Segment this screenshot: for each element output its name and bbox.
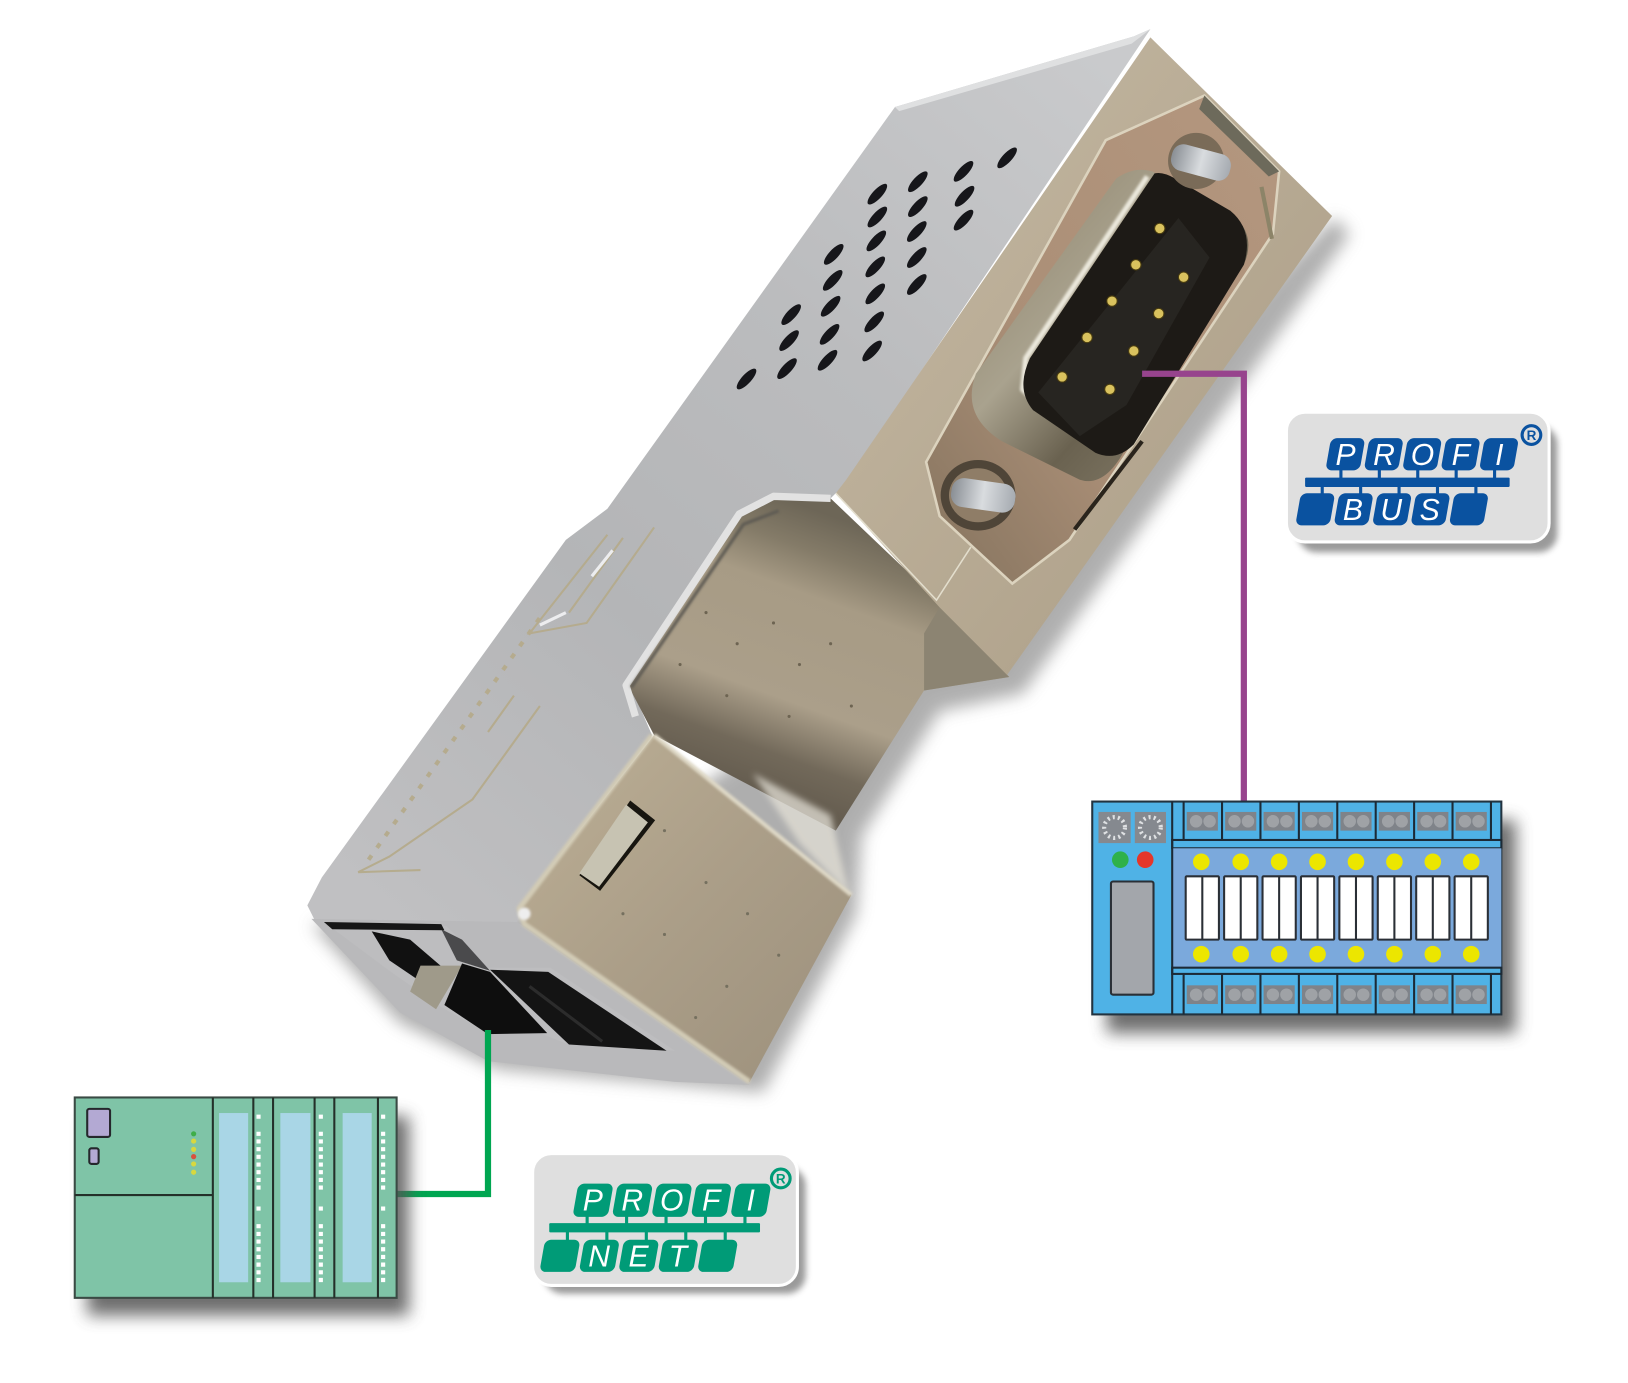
top terminals: [1187, 812, 1487, 831]
IO indicator dots: [259, 1115, 383, 1282]
PROFINET logo: R: [621, 1185, 643, 1218]
PROFINET logo: R: [776, 1172, 786, 1187]
PROFIBUS logo: O: [1411, 439, 1434, 472]
PROFIBUS logo: S: [1420, 494, 1440, 527]
drop shadow of gateway: [311, 218, 1350, 1092]
front cap: [518, 735, 851, 1082]
PROFINET logo: F: [702, 1185, 722, 1218]
status LEDs: [1112, 851, 1154, 868]
rotary dials: [1098, 812, 1166, 843]
PROFIBUS cable: [1142, 374, 1244, 802]
yellow LEDs: [1193, 853, 1480, 962]
PROFINET logo: P: [583, 1185, 603, 1218]
CPU slots: [87, 1109, 110, 1164]
connector shell: [972, 170, 1248, 481]
engraved logo lines: [358, 527, 654, 872]
upper screw: [1168, 133, 1234, 189]
PROFIBUS logo: P: [1336, 439, 1356, 472]
bottom terminals: [1187, 985, 1487, 1004]
connector inner black: [1023, 173, 1247, 456]
PROFINET cable: [397, 1030, 488, 1194]
PLC shadow: [87, 1116, 409, 1315]
PROFINET logo: I: [746, 1185, 755, 1218]
label window: [1111, 882, 1154, 995]
PROFINET logo: E: [628, 1241, 649, 1274]
rear plate with connector: [836, 37, 1332, 675]
pins: [1057, 223, 1189, 395]
PROFIBUS logo: R: [1373, 439, 1395, 472]
lower screw: [941, 460, 1017, 531]
module shadow: [1107, 820, 1516, 1033]
white relay blocks: [1186, 876, 1488, 940]
PROFIBUS logo: B: [1343, 494, 1363, 527]
PROFIBUS logo: [1286, 412, 1557, 552]
PROFINET logo: T: [669, 1241, 690, 1274]
PROFINET logo: O: [660, 1185, 683, 1218]
metal recess: [926, 96, 1279, 584]
PLC blue panels: [219, 1113, 372, 1282]
PROFIBUS logo: F: [1452, 439, 1472, 472]
end face with ethernet ports: [311, 919, 750, 1085]
PROFIBUS logo: U: [1380, 494, 1402, 527]
PROFIBUS logo: R: [1527, 428, 1537, 443]
PLC: [75, 1097, 409, 1315]
module bus panel: [1172, 802, 1501, 1014]
gateway connector photo: [307, 29, 1350, 1092]
IO module: [1092, 802, 1516, 1033]
PROFINET logo: [533, 1154, 806, 1294]
speckles on middle section: [679, 611, 853, 718]
PROFINET logo: N: [588, 1241, 610, 1274]
vent holes: [734, 145, 1020, 392]
middle recessed section: [626, 496, 1009, 895]
speckles on cap: [621, 829, 780, 1019]
latch slot: [579, 801, 655, 891]
CPU LEDs: [191, 1131, 196, 1175]
PROFIBUS logo: I: [1495, 439, 1504, 472]
silver top face: [307, 29, 1150, 924]
terminal screws: [1190, 815, 1485, 1001]
